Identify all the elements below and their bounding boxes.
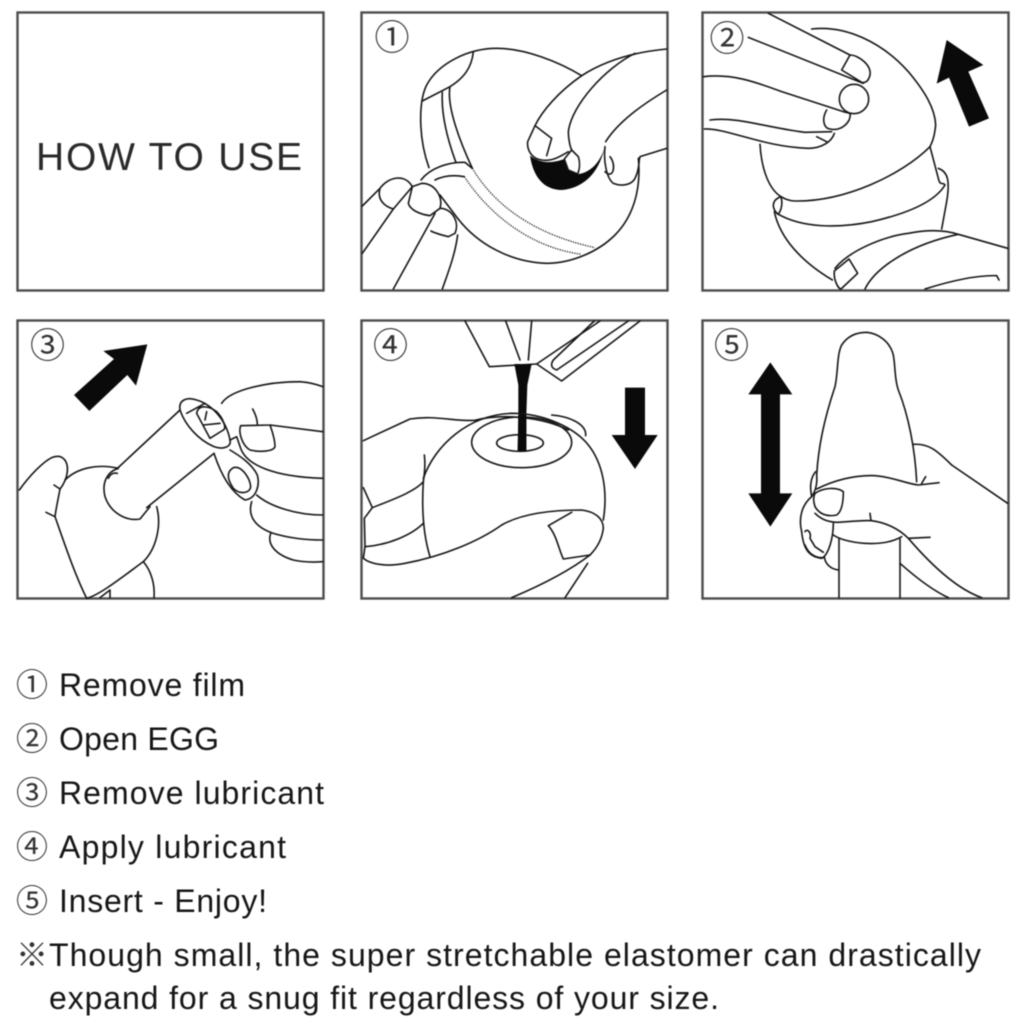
step 4 label: ④ xyxy=(16,822,48,868)
note: elastomer stretch xyxy=(16,930,981,1016)
arrow: double headed vertical xyxy=(748,362,792,527)
illustration: hands opening egg xyxy=(703,13,1008,289)
step number 4: ④ xyxy=(373,318,408,369)
step number 3: ③ xyxy=(30,318,65,369)
step number 5: ⑤ xyxy=(714,318,749,369)
black opening xyxy=(530,148,604,190)
note: elastomer stretch: Though small, the super stretchable elastomer can drastically xyxy=(49,937,981,973)
step 2 label xyxy=(16,714,219,760)
panel: step 5 insert xyxy=(702,318,1008,598)
panel: how to use heading xyxy=(18,12,324,290)
panel: step 3 remove lubricant xyxy=(18,318,324,598)
arrow: down xyxy=(612,388,658,469)
step 5 label: Insert - Enjoy! xyxy=(59,883,267,919)
step 3 label: ③ xyxy=(16,768,48,814)
panel: step 2 open egg xyxy=(702,11,1008,290)
step 2 label: ② xyxy=(16,714,48,760)
step 4 label: Apply lubricant xyxy=(59,829,286,865)
step 4 label xyxy=(16,822,286,868)
step 1 label xyxy=(16,660,245,706)
step 5 label xyxy=(16,876,267,922)
step 5 label: ⑤ xyxy=(16,876,48,922)
step number 2: ② xyxy=(710,11,745,62)
note: elastomer stretch: expand for a snug fit regardless of your size. xyxy=(49,980,719,1016)
illustration: pouring lubricant into egg xyxy=(363,321,658,598)
illustration: pulling lubricant from egg xyxy=(19,344,323,598)
step 1 label: ① xyxy=(16,660,48,706)
illustration: hand holding stretched sleeve xyxy=(748,332,1008,598)
step number 1: ① xyxy=(374,10,410,61)
step 2 label: Open EGG xyxy=(59,721,219,757)
arrow: up and to the right xyxy=(74,344,147,411)
panel: step 4 apply lubricant xyxy=(362,318,668,598)
panel: step 1 remove film xyxy=(362,10,668,290)
heading: how to use: HOW TO USE xyxy=(36,136,302,179)
note: elastomer stretch: ※ xyxy=(16,930,48,976)
arrow: up and to the left xyxy=(937,40,989,127)
illustration: hands peeling film from egg xyxy=(362,48,667,289)
step 1 label: Remove film xyxy=(59,667,245,703)
list: numbered steps xyxy=(16,660,324,922)
step 3 label xyxy=(16,768,324,814)
step 3 label: Remove lubricant xyxy=(59,775,324,811)
